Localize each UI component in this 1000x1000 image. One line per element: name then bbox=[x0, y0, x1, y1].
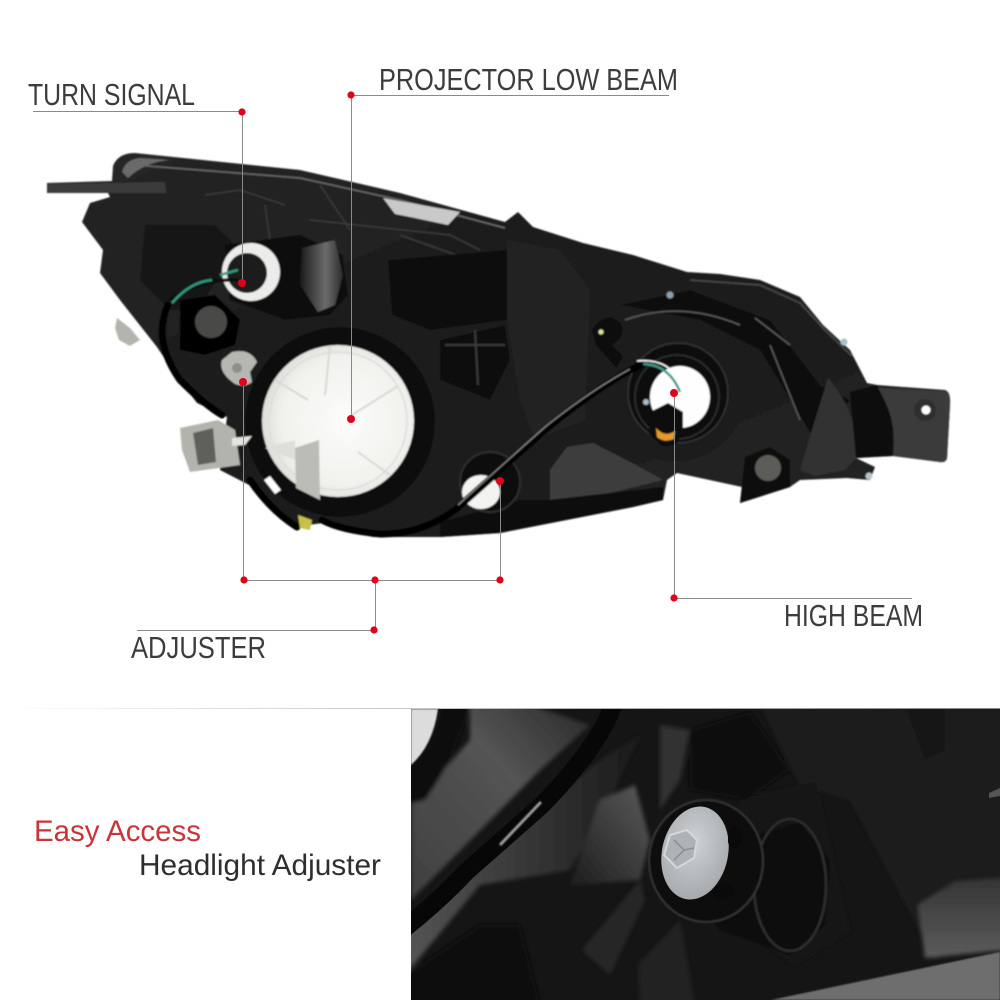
raised hex panel bbox=[738, 790, 761, 801]
socket highlight bbox=[300, 240, 343, 312]
lower left dark panel bbox=[422, 924, 539, 1000]
top trim highlight bbox=[135, 165, 505, 228]
left wire loop bbox=[162, 305, 297, 527]
lower tray panel bbox=[550, 443, 663, 500]
left grey panel bbox=[411, 705, 590, 900]
right flank panel bbox=[620, 290, 850, 440]
high beam socket bbox=[611, 329, 743, 461]
wire harness bbox=[405, 705, 613, 928]
label: projector low beam: PROJECTOR LOW BEAM bbox=[379, 62, 678, 97]
turn signal dark housing bbox=[225, 235, 348, 320]
divider line above detail section bbox=[0, 708, 1000, 709]
underside white gaps bbox=[264, 476, 281, 494]
main wire harness bbox=[322, 365, 640, 534]
left housing shade bbox=[140, 225, 240, 310]
recess struts bbox=[440, 325, 510, 400]
white lens corner bbox=[411, 709, 438, 765]
right recess panel bbox=[507, 240, 590, 440]
lower tray dark strip bbox=[440, 487, 663, 537]
clear lens piece bbox=[383, 198, 460, 225]
recess cross brace bbox=[445, 330, 505, 385]
bolt housing bbox=[592, 318, 632, 372]
label: turn signal: TURN SIGNAL bbox=[28, 77, 195, 112]
wire splice bbox=[298, 515, 312, 530]
top lens edge bbox=[122, 158, 170, 178]
left mounting strip bbox=[47, 182, 166, 193]
lower right grey area bbox=[918, 878, 1000, 958]
flank highlights bbox=[625, 311, 800, 420]
wire highlight bbox=[458, 369, 630, 505]
callout lines bbox=[33, 95, 912, 630]
center lit panel bbox=[570, 785, 650, 885]
lower centre fin bbox=[582, 880, 645, 975]
caption: easy access: Easy Access bbox=[34, 815, 201, 848]
top right housing bbox=[764, 709, 1000, 930]
central dark block bbox=[388, 250, 507, 330]
high beam connector bbox=[649, 403, 683, 447]
low beam cover cap bbox=[262, 345, 414, 500]
label: high beam: HIGH BEAM bbox=[784, 598, 923, 633]
grommet bracket bbox=[740, 447, 790, 503]
adjuster body bbox=[649, 800, 830, 955]
low beam socket bbox=[460, 452, 520, 512]
headlight rear illustration bbox=[47, 153, 950, 537]
big cap surround bbox=[245, 327, 435, 517]
red callout dots bbox=[238, 91, 678, 634]
bottom strip bbox=[771, 952, 1000, 1000]
right ribbed area bbox=[850, 385, 893, 458]
label: adjuster: ADJUSTER bbox=[131, 630, 266, 665]
outer rim ribs bbox=[690, 280, 852, 356]
right screw bbox=[840, 338, 848, 346]
upper fold light bbox=[660, 725, 690, 810]
upper fold dark bbox=[690, 712, 790, 800]
wire highlight bbox=[500, 802, 541, 845]
lower right screw bbox=[866, 472, 872, 480]
grey grommet bbox=[755, 455, 781, 481]
lens corner dark fold bbox=[411, 709, 465, 804]
chrome bolt bbox=[115, 318, 140, 346]
upper screw bbox=[666, 292, 674, 298]
turn signal wire bbox=[170, 280, 238, 300]
grey adjuster nut bbox=[221, 351, 257, 386]
blurred background shapes bbox=[405, 705, 1000, 1000]
caption: headlight adjuster: Headlight Adjuster bbox=[139, 849, 381, 882]
silver adjuster disc bbox=[661, 806, 729, 900]
headlight housing bbox=[47, 153, 950, 537]
upper ribs bbox=[205, 185, 480, 260]
right curved lower fan bbox=[800, 378, 856, 476]
mounting tab bbox=[878, 388, 950, 462]
lower left wedge bbox=[405, 735, 640, 975]
photo base bbox=[411, 709, 1000, 1000]
disc slots bbox=[728, 837, 729, 844]
high beam wire teal bbox=[637, 361, 680, 382]
blade detail bbox=[989, 788, 1000, 798]
turn signal socket bbox=[222, 243, 280, 301]
adjuster left dark recess bbox=[180, 295, 240, 355]
top right dark band bbox=[905, 705, 945, 760]
mounting hole bbox=[914, 399, 936, 421]
grey wiring connector bbox=[180, 420, 252, 472]
detail photo panel: adjuster close-up bbox=[405, 705, 1000, 1000]
grey dome bbox=[195, 306, 227, 338]
lower centre fin 2 bbox=[638, 920, 695, 1000]
